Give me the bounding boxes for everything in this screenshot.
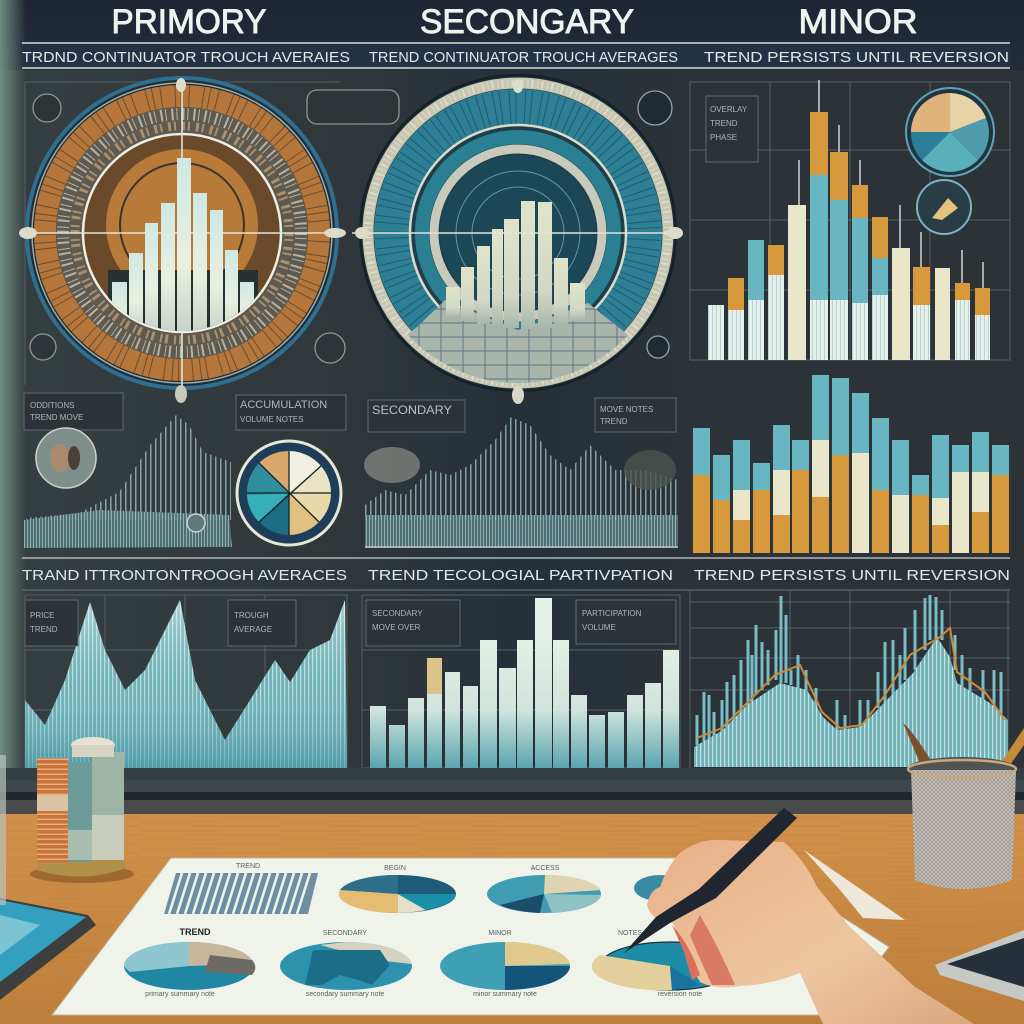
sheet captions: reversion note bbox=[658, 991, 702, 998]
row 2 stacked bar chart bbox=[693, 375, 1009, 553]
bars inside secondary circle bbox=[446, 201, 585, 329]
sheet captions: TREND bbox=[236, 863, 260, 870]
text box: row 3 left a: PRICE bbox=[30, 611, 54, 620]
text box: row 2 center bbox=[236, 395, 346, 430]
text box: secondary label bbox=[368, 400, 465, 432]
hatch floor of secondary circle bbox=[408, 300, 628, 383]
middle subtitle band: TRAND ITTRONTONTROOGH AVERACES bbox=[22, 567, 347, 584]
wooden desk bbox=[0, 814, 1024, 1024]
row 3 area chart left bbox=[25, 595, 347, 768]
row 2 middle panel bbox=[364, 398, 678, 548]
pie: sheet bottom 4 bbox=[592, 942, 740, 990]
sheet captions: primary summary note bbox=[145, 991, 215, 998]
text box: row 3 middle b: PARTICIPATION bbox=[582, 609, 642, 618]
text box: row 3 left b: TROUGH bbox=[234, 611, 269, 620]
pie chart: row 2 bbox=[237, 441, 341, 545]
sheet captions bbox=[145, 863, 702, 998]
text box: row 2 left: TREND MOVE bbox=[30, 413, 83, 422]
title: secondary: SECONGARY bbox=[420, 3, 634, 41]
coin stack bbox=[30, 737, 134, 883]
text box: row 2 middle: MOVE NOTES bbox=[600, 405, 653, 414]
area chart: row 2 middle bbox=[364, 417, 678, 548]
icon: top marker bbox=[176, 78, 186, 92]
text box: row 3 left a bbox=[25, 600, 78, 646]
stacked bars bbox=[708, 112, 990, 360]
text box: row 3 middle a: MOVE OVER bbox=[372, 623, 421, 632]
sheet captions: TREND bbox=[180, 927, 211, 937]
text box: minor notes: TREND bbox=[710, 119, 738, 128]
minor bar chart panel bbox=[690, 80, 1010, 360]
secondary circular chart bbox=[352, 75, 683, 404]
book bbox=[0, 898, 96, 1000]
sheet captions: minor summary note bbox=[473, 991, 537, 998]
area chart: row 2 left bbox=[24, 415, 232, 548]
pencil cup bbox=[903, 723, 1024, 889]
top subtitle band: TREND PERSISTS UNTIL REVERSION bbox=[704, 49, 1009, 66]
text box: row 3 middle a bbox=[366, 600, 460, 646]
pie: sheet top 2 bbox=[487, 875, 601, 913]
sheet captions: MINOR bbox=[488, 930, 512, 937]
pie: sheet top 1 bbox=[339, 875, 456, 913]
text box: row 3 middle b bbox=[576, 600, 676, 644]
text box: row 3 middle a: SECONDARY bbox=[372, 609, 423, 618]
text box: row 2 left bbox=[24, 393, 123, 430]
row 2 left panel bbox=[24, 393, 346, 548]
sheet captions: SECONDARY bbox=[323, 930, 367, 937]
glass bbox=[0, 755, 6, 905]
trend line bbox=[697, 628, 1005, 738]
text box: row 2 middle: TREND bbox=[600, 417, 628, 426]
pie: sheet bottom 1 bbox=[124, 942, 255, 990]
text box: row 3 left a: TREND bbox=[30, 625, 58, 634]
spikes bbox=[697, 595, 1001, 745]
icon: secondary left marker bbox=[355, 227, 369, 239]
icon: right marker bbox=[324, 228, 346, 238]
icon: bottom marker bbox=[175, 385, 187, 403]
hand holding pen bbox=[624, 808, 974, 1024]
icon: lens bbox=[36, 428, 96, 488]
pie: sheet top 3 bbox=[634, 875, 686, 901]
row 3 area chart right bbox=[690, 590, 1010, 768]
sheet captions: NOTES bbox=[618, 930, 642, 937]
middle subtitle band: TREND TECOLOGIAL PARTIVPATION bbox=[368, 567, 673, 584]
small note icons around primary circle bbox=[30, 90, 399, 363]
text box: minor notes bbox=[706, 96, 758, 162]
icon: minor small circle bbox=[917, 180, 971, 234]
pie: sheet bottom 2 bbox=[280, 942, 412, 990]
text box: row 2 left: ODDITIONS bbox=[30, 401, 74, 410]
top subtitle band: TREND CONTINUATOR TROUCH AVERAGES bbox=[369, 49, 678, 66]
middle subtitle band: TREND PERSISTS UNTIL REVERSION bbox=[694, 567, 1010, 584]
text box: row 2 center: VOLUME NOTES bbox=[240, 415, 304, 424]
pen bbox=[624, 808, 797, 953]
title: minor: MINOR bbox=[798, 3, 918, 41]
icon: left marker bbox=[19, 227, 37, 239]
middle subtitle band bbox=[22, 558, 1010, 590]
bars inside primary circle bbox=[108, 158, 258, 342]
sheet captions: ACCESS bbox=[531, 865, 560, 872]
text box: secondary label: SECONDARY bbox=[372, 403, 452, 417]
row 3 bar chart middle bbox=[362, 595, 680, 768]
text box: row 2 middle bbox=[595, 398, 676, 432]
top subtitle band bbox=[22, 43, 1010, 68]
icon: secondary right marker bbox=[667, 227, 683, 239]
small labels near secondary circle bbox=[638, 91, 672, 358]
striped bar block bbox=[164, 873, 318, 914]
pie chart: minor top right bbox=[906, 88, 994, 176]
board ledge bbox=[0, 768, 1024, 814]
worksheet paper bbox=[52, 858, 889, 1015]
tablet bbox=[935, 930, 1024, 1001]
primary circular chart bbox=[19, 78, 346, 403]
sheet captions: BEGIN bbox=[384, 865, 406, 872]
top subtitle band: TRDND CONTINUATOR TROUCH AVERAIES bbox=[22, 49, 350, 66]
background sheet bbox=[804, 850, 905, 920]
text box: row 3 middle b: VOLUME bbox=[582, 623, 616, 632]
board background bbox=[0, 0, 1024, 815]
icon: secondary bottom marker bbox=[512, 386, 524, 404]
text box: row 3 left b: AVERAGE bbox=[234, 625, 272, 634]
text box: minor notes: PHASE bbox=[710, 133, 737, 142]
whisker lines bbox=[799, 80, 983, 288]
text box: row 3 left b bbox=[228, 600, 296, 646]
title: primary: PRIMORY bbox=[112, 3, 266, 41]
pie: sheet bottom 3 bbox=[440, 942, 570, 990]
icon: secondary top marker bbox=[513, 79, 523, 93]
text box: minor notes: OVERLAY bbox=[710, 105, 748, 114]
sheet captions: secondary summary note bbox=[306, 991, 384, 998]
text box: row 2 center: ACCUMULATION bbox=[240, 399, 327, 411]
